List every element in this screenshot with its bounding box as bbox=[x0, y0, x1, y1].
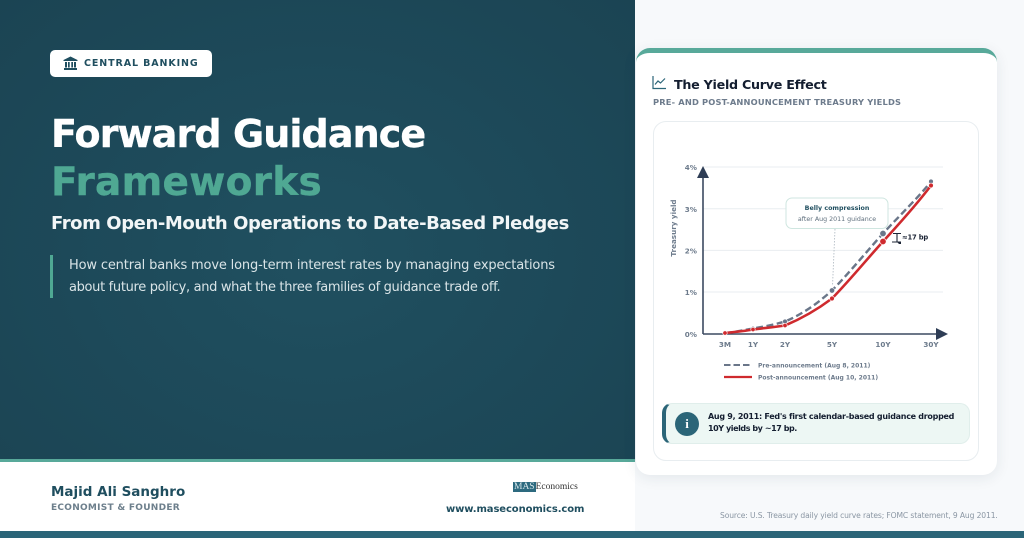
x axis labels: 2Y bbox=[780, 340, 791, 349]
title accent: Frameworks bbox=[51, 160, 322, 205]
note text: 10Y yields by ~17 bp. bbox=[708, 424, 797, 433]
icon: bank bbox=[64, 56, 78, 70]
logo: MAS Economics: MASEconomics bbox=[514, 482, 578, 492]
author role: ECONOMIST & FOUNDER bbox=[51, 503, 180, 513]
description text: How central banks move long-term interest rates by managing expectations bbox=[69, 258, 555, 273]
axes bbox=[697, 166, 948, 340]
bottom band bbox=[0, 531, 1024, 538]
legend: Pre-announcement (Aug 8, 2011) bbox=[758, 362, 871, 370]
note text: Aug 9, 2011: Fed's first calendar-based guidance dropped bbox=[708, 412, 954, 421]
badge label: CENTRAL BANKING bbox=[84, 58, 199, 69]
card title: The Yield Curve Effect bbox=[674, 77, 827, 92]
callout: belly compression bbox=[786, 198, 888, 228]
y axis tick labels bbox=[685, 163, 697, 339]
y axis tick labels: 4% bbox=[685, 163, 697, 172]
x axis labels: 30Y bbox=[923, 340, 939, 349]
description with accent bar bbox=[50, 255, 570, 298]
annotation: 17 bp: ≈17 bp bbox=[902, 234, 928, 242]
author name: Majid Ali Sanghro bbox=[51, 484, 185, 500]
title: Forward Guidance bbox=[51, 112, 425, 156]
x axis labels: 1Y bbox=[748, 340, 759, 349]
y axis tick labels: 0% bbox=[685, 330, 697, 339]
y axis tick labels: 1% bbox=[685, 288, 697, 297]
icon: line chart bbox=[652, 76, 666, 90]
callout: belly compression: Belly compression bbox=[805, 205, 869, 212]
source note: Source: U.S. Treasury daily yield curve rates; FOMC statement, 9 Aug 2011. bbox=[720, 511, 998, 520]
note text bbox=[708, 412, 954, 433]
annotation: 17 bp bbox=[892, 234, 928, 244]
chart frame bbox=[653, 121, 979, 461]
y axis title: Treasury yield bbox=[669, 199, 678, 257]
x axis labels: 3M bbox=[719, 340, 731, 349]
subtitle: From Open-Mouth Operations to Date-Based Pledges bbox=[51, 213, 569, 234]
icon: info bbox=[675, 412, 699, 436]
badge: central banking bbox=[50, 50, 212, 77]
icon: info: i bbox=[685, 416, 689, 431]
card subtitle: PRE- AND POST-ANNOUNCEMENT TREASURY YIELDS bbox=[653, 97, 901, 107]
x axis labels: 10Y bbox=[875, 340, 891, 349]
panel: hero background bbox=[0, 0, 635, 459]
callout leader line bbox=[832, 229, 835, 286]
y axis tick labels: 3% bbox=[685, 205, 697, 214]
description text bbox=[69, 258, 555, 295]
x axis labels bbox=[719, 340, 939, 349]
x axis labels: 5Y bbox=[827, 340, 838, 349]
website: www.maseconomics.com bbox=[446, 504, 584, 515]
pre-announcement line bbox=[723, 179, 933, 335]
legend bbox=[724, 362, 878, 382]
callout: info note bbox=[662, 403, 970, 444]
description text: about future policy, and what the three families of guidance trade off. bbox=[69, 280, 500, 295]
panel: yield curve card bbox=[636, 48, 997, 475]
legend: Post-announcement (Aug 10, 2011) bbox=[758, 374, 878, 382]
post-announcement line bbox=[723, 183, 933, 335]
y axis tick labels: 2% bbox=[685, 246, 697, 256]
callout: belly compression: after Aug 2011 guidance bbox=[798, 216, 876, 223]
chart: yield curves bbox=[669, 163, 948, 382]
panel: footer bbox=[0, 459, 635, 531]
